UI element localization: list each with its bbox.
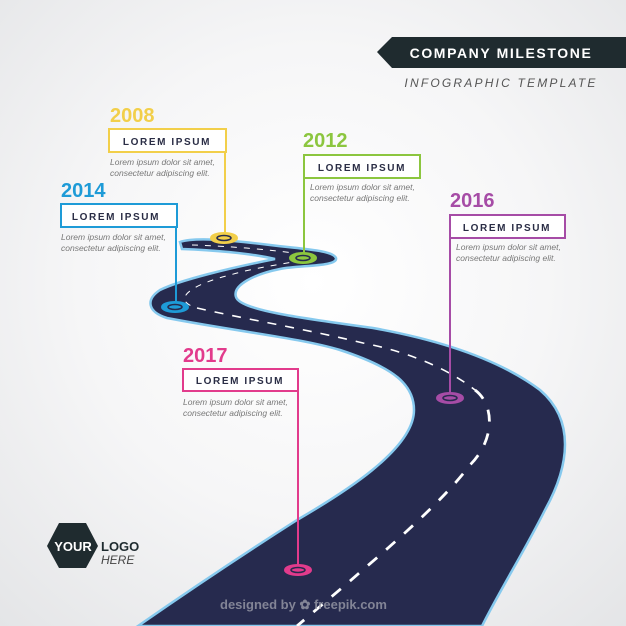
milestone 2014: LOREM IPSUM [72,212,160,223]
milestone 2012: consectetur adipiscing elit. [310,193,410,203]
milestone 2008: 2008 [110,105,154,127]
milestone 2008: consectetur adipiscing elit. [110,168,210,178]
logo [47,523,139,568]
milestone 2017: Lorem ipsum dolor sit amet, [183,397,288,407]
milestone 2017: 2017 [183,345,228,367]
milestone 2014: Lorem ipsum dolor sit amet, [61,232,166,242]
milestone 2012 [290,130,420,263]
milestone 2017: LOREM IPSUM [196,376,284,387]
milestone 2014: 2014 [61,180,106,202]
milestone 2014: consectetur adipiscing elit. [61,243,161,253]
milestone 2017: consectetur adipiscing elit. [183,408,283,418]
logo: LOGO [101,539,139,554]
milestone 2008: LOREM IPSUM [123,137,211,148]
logo: YOUR [54,539,92,554]
milestone 2008: Lorem ipsum dolor sit amet, [110,157,215,167]
milestone 2016: LOREM IPSUM [463,223,551,234]
milestone 2008 [109,105,237,243]
milestone 2016: Lorem ipsum dolor sit amet, [456,242,561,252]
road [138,239,565,626]
logo: HERE [101,553,135,567]
milestone 2016: consectetur adipiscing elit. [456,253,556,263]
subtitle: INFOGRAPHIC TEMPLATE [404,76,598,90]
milestone 2016 [437,190,565,403]
milestone 2017 [183,345,311,575]
title banner: COMPANY MILESTONE [410,45,592,61]
milestone 2012: Lorem ipsum dolor sit amet, [310,182,415,192]
milestone 2016: 2016 [450,190,494,212]
milestone 2012: 2012 [303,130,348,152]
watermark: designed by ✿ freepik.com [220,597,387,612]
milestone 2012: LOREM IPSUM [318,163,406,174]
milestone 2014 [61,180,188,312]
title banner [377,37,626,68]
